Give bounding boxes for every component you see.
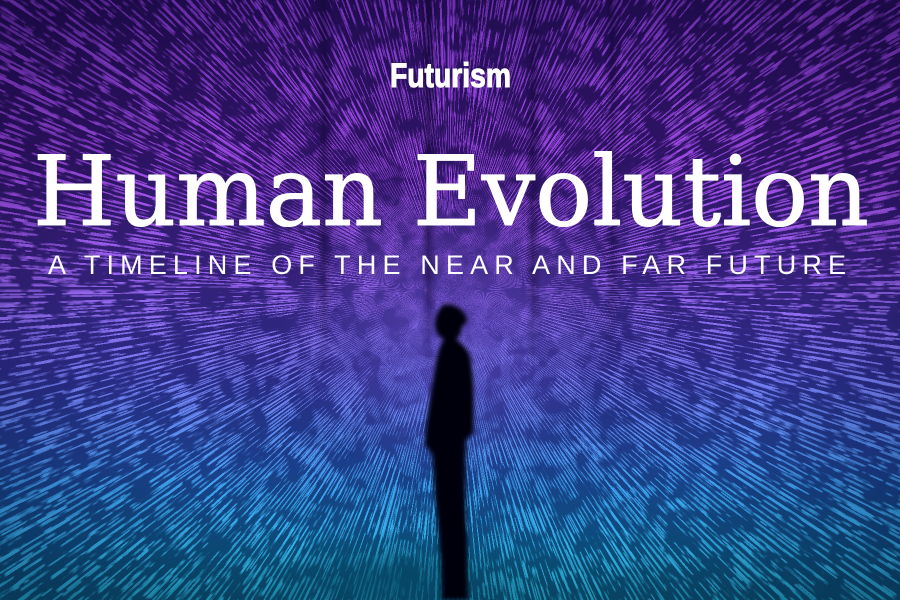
- subtitle: a timeline of the near and far future: A TIMELINE OF THE NEAR AND FAR FUTURE: [48, 250, 846, 280]
